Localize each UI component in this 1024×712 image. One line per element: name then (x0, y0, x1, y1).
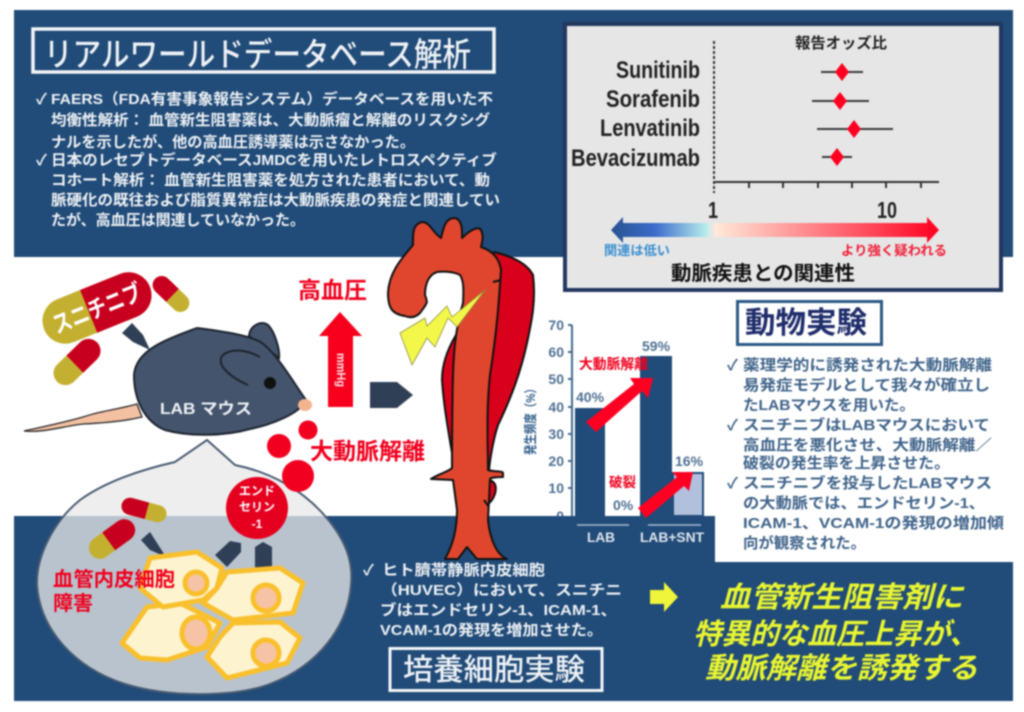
text block: database analysis findings: コホート解析： 血管新生阻害薬を処方された患者において、動 (51, 171, 490, 189)
endothelin-1 circle: -1 (252, 517, 263, 531)
conclusion text: 血管新生阻害剤に (720, 582, 965, 614)
value labels: 59% (642, 338, 671, 354)
drug labels: Bevacizumab (571, 145, 700, 172)
pill: bubble upper (120, 496, 168, 524)
label: aortic dissection: 大動脈解離 (579, 356, 648, 372)
text block: database analysis findings: ナルを示したが、他の高血圧誘導薬は示さなかった。 (51, 133, 415, 151)
label: endothelial cell injury: 障害 (53, 592, 93, 615)
true lumen (388, 218, 507, 559)
y axis tick labels: 50 (548, 371, 564, 387)
text block: animal experiment findings: ICAM-1、VCAM-1の発現の増加傾 (743, 514, 1004, 532)
pointer: pill to mouse (122, 323, 150, 350)
bar: LAB dissection (575, 408, 605, 516)
mouse nose (298, 399, 312, 411)
false lumen (470, 252, 534, 507)
value labels (576, 338, 704, 513)
endothelial cells (122, 552, 303, 678)
text block: database analysis findings: FAERS（FDA有害事象報告システム）データベースを用いた不 (51, 90, 493, 108)
drug labels: Sunitinib (616, 57, 700, 84)
label: strongly suspected: より強く疑われる (841, 243, 947, 258)
forest plot estimates and confidence intervals (812, 63, 893, 166)
arrow: rupture increase (638, 472, 693, 518)
text block: animal experiment findings: スニチニブを投与したLABマウス (743, 474, 992, 492)
axis labels: 10 (877, 197, 897, 223)
y axis and ticks (568, 325, 572, 516)
panel: reporting odds ratio forest plot (565, 24, 1001, 290)
lightning bolt (400, 290, 485, 365)
text block: animal experiment findings: の大動脈では、エンドセリン-1、 (743, 494, 985, 512)
y axis tick labels: 10 (548, 480, 564, 496)
panel: real-world database analysis background (14, 10, 1013, 257)
text block: HUVEC findings (363, 561, 622, 639)
label: aortic dissection: 大動脈解離 (310, 438, 425, 464)
text block: HUVEC findings: ブはエンドセリン-1、ICAM-1、 (380, 601, 617, 619)
label: endothelial cell injury: 血管内皮細胞 (53, 568, 175, 591)
bar: LAB+SNT rupture (673, 473, 703, 516)
label: hypertension: 高血圧 (298, 277, 367, 303)
arrow: blood pressure increase (319, 312, 362, 407)
y axis tick labels: 30 (548, 426, 564, 442)
axis labels (708, 197, 897, 223)
text block: animal experiment findings: ✓ (727, 357, 738, 374)
y axis tick labels: 70 (548, 317, 564, 333)
label: LAB mouse: LAB マウス (160, 400, 252, 418)
heading: cell culture experiment: 培養細胞実験 (403, 654, 585, 687)
category labels (587, 529, 704, 545)
text block: database analysis findings: たが、高血圧は関連していなかった。 (51, 211, 305, 229)
text block: database analysis findings (36, 90, 500, 229)
intimal flap marks (484, 280, 501, 507)
value labels: 16% (675, 453, 704, 469)
arrow: blood pressure increase: mmHg (334, 353, 348, 387)
text block: HUVEC findings: ✓ (363, 562, 374, 579)
text block: animal experiment findings: 薬理学的に誘発された大動脈解離 (743, 356, 992, 374)
label: association with arterial disease: 動脈疾患との関連性 (671, 261, 855, 285)
category labels: LAB (587, 529, 615, 545)
arrow: stronger suspicion (714, 217, 939, 243)
chart tick label: zero, partly hidden by the panel below: 0 (556, 508, 564, 524)
y axis tick labels: 20 (548, 453, 564, 469)
category labels: LAB+SNT (640, 529, 704, 545)
text block: HUVEC findings: VCAM-1の発現を増加させた。 (380, 621, 603, 639)
heading: animal experiment: 動物実験 (745, 307, 867, 340)
value labels: 40% (576, 389, 605, 405)
false lumen left (442, 335, 470, 465)
arrow: to conclusion (650, 582, 678, 612)
y axis tick labels: 40 (548, 399, 564, 415)
arrow: lower association (611, 217, 709, 243)
illustration: dissected aorta (388, 218, 534, 559)
text block: animal experiment findings: 破裂の発生率を上昇させた。 (743, 454, 950, 472)
heading: cell culture experiment (390, 648, 602, 690)
text block: database analysis findings: 日本のレセプトデータベースJMDCを用いたレトロスペクティブ (51, 151, 497, 169)
text block: HUVEC findings: ヒト臍帯静脈内皮細胞 (382, 561, 545, 579)
text block: database analysis findings: 均衡性解析： 血管新生阻害薬は、大動脈瘤と解離のリスクシグ (51, 111, 490, 129)
arrow: leads to aorta (370, 382, 413, 408)
text block: animal experiment findings: ✓ (727, 475, 738, 492)
bar: LAB+SNT dissection (640, 356, 672, 516)
illustration: LAB mouse (24, 323, 312, 435)
mouse tail (24, 404, 142, 431)
illustration: endothelial injury bubble (37, 440, 351, 694)
text block: animal experiment findings: たLABマウスを用いた。 (743, 397, 915, 414)
label: rupture: 破裂 (609, 474, 636, 490)
blood droplets (267, 420, 318, 492)
text block: animal experiment findings: 高血圧を悪化させ、大動脈解離／ (743, 436, 992, 454)
mouse eye (264, 377, 276, 389)
text block: animal experiment findings: スニチニブはLABマウスにおいて (743, 416, 990, 434)
pill: bubble lower (84, 515, 140, 563)
pill: small lower left (49, 334, 105, 390)
panel: culture and conclusion background (14, 516, 1013, 701)
heading: real-world database analysis: リアルワールドデータベース解析 (44, 36, 471, 73)
mouse body (134, 328, 306, 435)
endothelin-1 circle: エンド (239, 484, 275, 498)
chart: incidence of aortic dissection and rupture (523, 317, 704, 545)
conclusion text: 特異的な血圧上昇が、 (693, 618, 978, 651)
chart title: reporting odds ratio: 報告オッズ比 (795, 34, 887, 52)
text block: HUVEC findings: （HUVEC）において、スニチニ (381, 582, 622, 599)
label: endothelial cell injury (53, 568, 175, 615)
label: low association: 関連は低い (604, 243, 670, 258)
drug labels: Lenvatinib (600, 115, 700, 142)
group separators (577, 524, 701, 526)
pointers toward cells (141, 532, 272, 570)
text block: database analysis findings: ✓ (36, 91, 47, 108)
y axis tick labels (548, 317, 564, 496)
endothelin-1 circle: セリン (239, 500, 275, 514)
y axis tick labels: 60 (548, 344, 564, 360)
arrow: dissection increase (586, 378, 653, 432)
value labels: 0% (613, 497, 634, 513)
mouse ear (249, 323, 279, 358)
y axis title: incidence: 発生頻度（%） (523, 383, 538, 455)
conclusion text (693, 582, 978, 685)
text block: animal experiment findings: 向が観察された。 (743, 534, 866, 552)
text block: animal experiment findings: 易発症モデルとして我々が確立し (743, 376, 990, 394)
drug labels: Sorafenib (606, 86, 700, 113)
mouse inner ear line (221, 350, 260, 385)
text block: animal experiment findings: ✓ (727, 417, 738, 434)
drug labels (571, 57, 700, 172)
axis labels: 1 (708, 197, 718, 223)
text block: database analysis findings: 脈硬化の既往および脂質異常症は大動脈疾患の発症と関連してい (51, 191, 500, 209)
pill: small upper right (149, 272, 193, 316)
pill: sunitinib (36, 265, 158, 351)
reference line and log axis (714, 41, 939, 193)
text block: animal experiment findings (727, 356, 1004, 552)
conclusion text: 動脈解離を誘発する (705, 653, 978, 685)
text block: database analysis findings: ✓ (36, 152, 47, 169)
pill: sunitinib: スニチニブ (49, 278, 146, 340)
heading: animal experiment (738, 302, 882, 344)
endothelin-1 circle (226, 477, 288, 539)
